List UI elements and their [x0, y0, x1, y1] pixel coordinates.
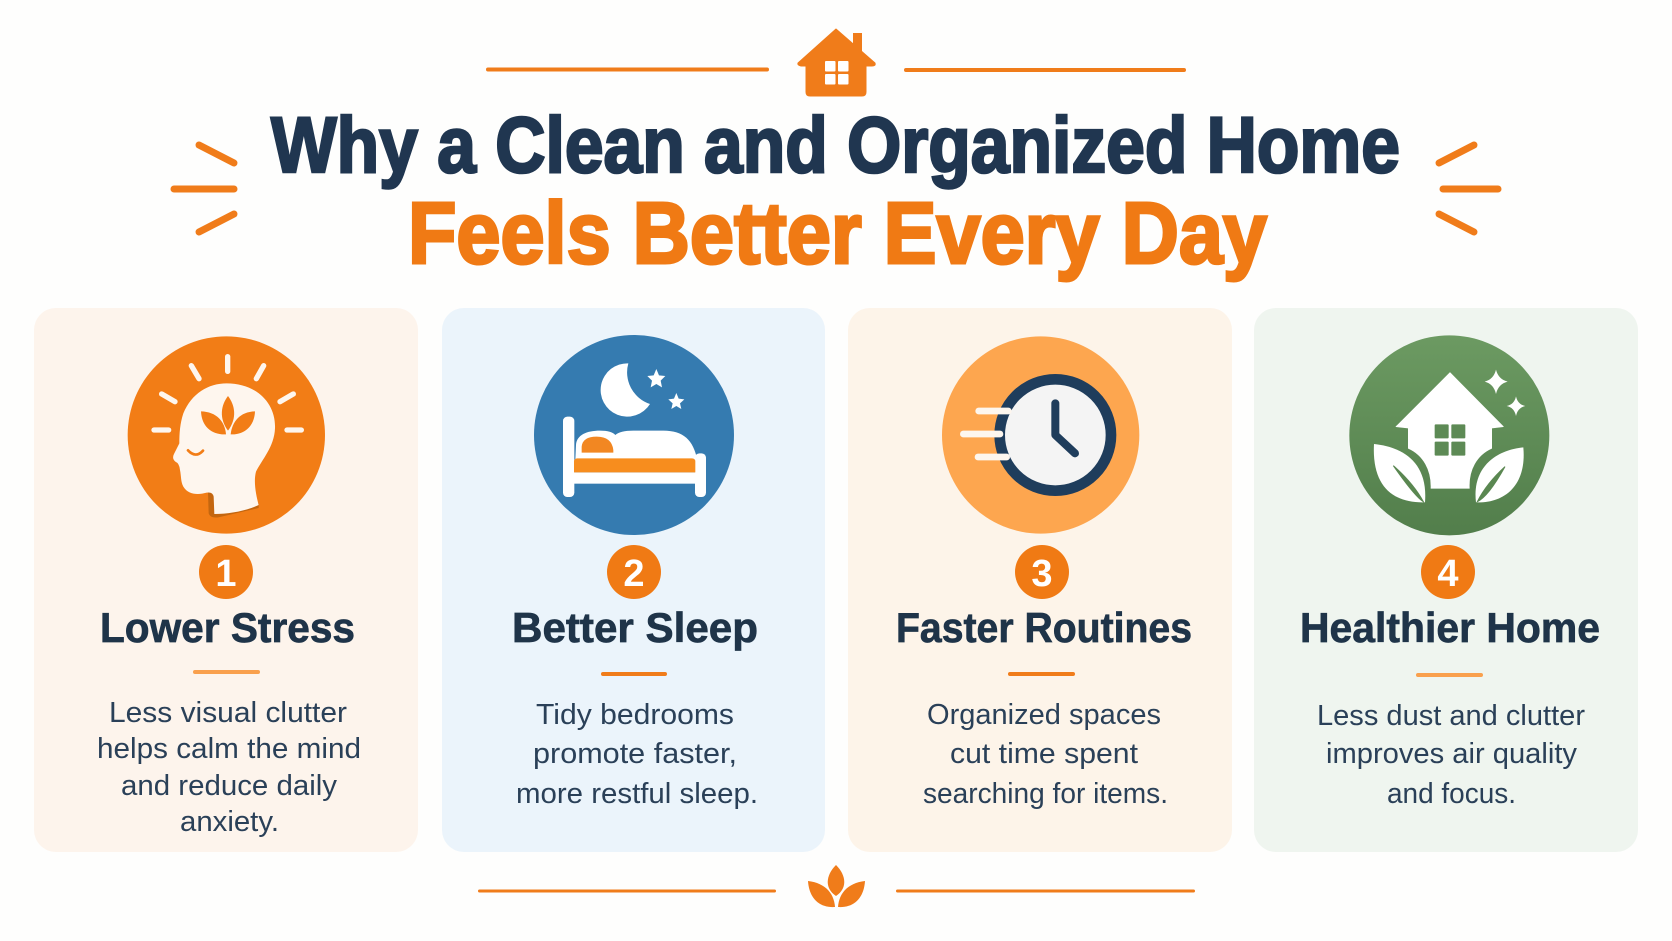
number badge 4: 4	[1437, 553, 1459, 595]
bottom ornament: leaves with lines	[478, 865, 1195, 907]
body text	[516, 699, 758, 810]
panel: better sleep	[442, 308, 825, 852]
body text: anxiety.	[180, 806, 279, 838]
icon: house	[798, 29, 875, 96]
body text	[923, 699, 1168, 810]
right rays	[1439, 145, 1498, 232]
title line 1: Why a Clean and Organized Home	[271, 100, 1400, 189]
title line 2: Feels Better Every Day	[408, 185, 1267, 282]
number badge 3: 3	[1031, 553, 1053, 595]
body text: Less visual clutter	[109, 697, 347, 729]
number badge 2: 2	[623, 553, 645, 595]
body text: Tidy bedrooms	[536, 699, 734, 731]
heading: Faster Routines	[896, 604, 1192, 651]
heading: Lower Stress	[100, 604, 355, 651]
panel: faster routines	[848, 308, 1232, 852]
body text: Less dust and clutter	[1317, 700, 1585, 732]
panel: healthier home	[1254, 308, 1638, 852]
body text: and focus.	[1387, 778, 1516, 810]
number badge 1: 1	[215, 553, 237, 595]
body text: improves air quality	[1326, 738, 1577, 770]
body text: helps calm the mind	[97, 733, 361, 765]
body text: cut time spent	[950, 738, 1138, 770]
body text: searching for items.	[923, 778, 1168, 810]
top ornament: house with lines	[486, 29, 1186, 96]
left rays	[174, 145, 234, 232]
icon: leaves	[808, 865, 865, 907]
body text: Organized spaces	[927, 699, 1161, 731]
panel: lower stress	[34, 308, 418, 852]
heading: Better Sleep	[512, 604, 758, 651]
heading: Healthier Home	[1300, 604, 1600, 651]
icon: bed with moon	[534, 335, 734, 535]
number badge 2	[607, 545, 661, 599]
body text: more restful sleep.	[516, 778, 758, 810]
body text: promote faster,	[533, 738, 737, 770]
number badge 3	[1015, 545, 1069, 599]
body text	[1317, 700, 1585, 810]
body text: and reduce daily	[121, 770, 337, 802]
number badge 4	[1421, 545, 1475, 599]
title	[271, 100, 1400, 282]
icon: fast clock	[942, 336, 1139, 534]
body text	[97, 697, 361, 838]
icon: home with leaves	[1349, 335, 1549, 535]
number badge 1	[199, 545, 253, 599]
icon: calm head	[128, 336, 325, 534]
